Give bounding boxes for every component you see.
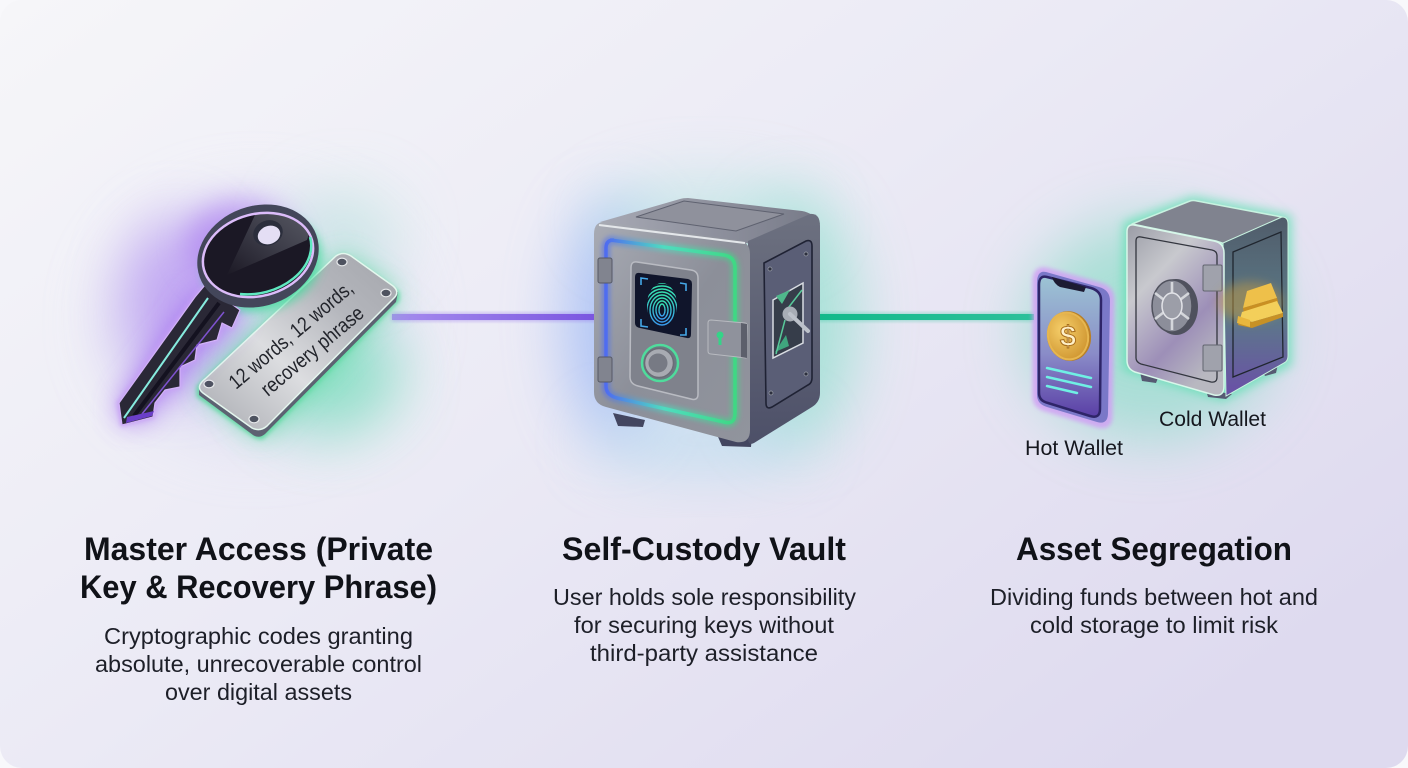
connector: key to vault bbox=[392, 313, 597, 321]
panel screws bbox=[768, 252, 808, 395]
icon: recovery phrase plate bbox=[198, 254, 398, 438]
safe neon outline bbox=[1127, 200, 1288, 397]
illustration: key and recovery plate bbox=[118, 188, 398, 438]
text block: asset segregation bbox=[990, 531, 1318, 638]
door neon bbox=[606, 240, 735, 423]
hinges bbox=[598, 258, 612, 382]
fingerprint screen bbox=[635, 273, 692, 338]
safe feet bbox=[1140, 364, 1278, 399]
description: master access: absolute, unrecoverable control bbox=[95, 651, 422, 677]
heading: master access: Master Access (Private bbox=[84, 531, 433, 567]
vault front bbox=[594, 222, 750, 442]
description: self-custody vault: User holds sole responsibility bbox=[553, 584, 857, 610]
screen lines bbox=[1047, 368, 1091, 393]
connector: vault to wallets bbox=[818, 313, 1034, 321]
description: self-custody vault: for securing keys without bbox=[574, 612, 835, 638]
lock plate bbox=[708, 320, 747, 358]
text block: master access bbox=[80, 531, 437, 705]
illustration: self-custody vault bbox=[594, 198, 820, 447]
label: cold wallet: Cold Wallet bbox=[1159, 407, 1266, 431]
vault top inset bbox=[636, 201, 784, 231]
label: hot wallet: Hot Wallet bbox=[1025, 436, 1123, 460]
description: self-custody vault: third-party assistance bbox=[590, 640, 818, 666]
key hole bbox=[250, 216, 286, 250]
side wheel window bbox=[773, 283, 808, 358]
plate text: recovery phrase bbox=[256, 302, 369, 401]
background glows bbox=[105, 180, 1275, 470]
description: master access: Cryptographic codes granting bbox=[104, 623, 413, 649]
heading: master access bbox=[80, 531, 437, 605]
icon: key bbox=[118, 188, 335, 425]
plate text: 12 words, 12 words, bbox=[224, 277, 358, 394]
coin: $ bbox=[1060, 321, 1076, 353]
description: master access bbox=[95, 623, 422, 705]
dial bbox=[642, 345, 678, 381]
safe front bbox=[1127, 225, 1224, 395]
description: master access: over digital assets bbox=[165, 679, 352, 705]
side panel bbox=[764, 241, 812, 408]
control panel bbox=[630, 262, 698, 399]
description: asset segregation: cold storage to limit risk bbox=[1030, 612, 1279, 638]
vault side bbox=[748, 214, 820, 444]
coin bbox=[1042, 307, 1096, 365]
safe wheel bbox=[1152, 279, 1198, 335]
phone neon outline bbox=[1035, 270, 1112, 426]
heading: master access: Key & Recovery Phrase) bbox=[80, 569, 437, 605]
description: asset segregation: Dividing funds between hot and bbox=[990, 584, 1318, 610]
description: self-custody vault bbox=[553, 584, 857, 666]
phone screen bbox=[1039, 277, 1101, 417]
plate rivets bbox=[204, 258, 391, 423]
safe door bbox=[1136, 237, 1217, 382]
vault top bbox=[600, 198, 820, 243]
gold bars bbox=[1218, 282, 1283, 328]
safe top bbox=[1132, 200, 1282, 244]
phone body bbox=[1037, 272, 1110, 423]
safe hinges bbox=[1203, 265, 1222, 371]
heading: self-custody vault: Self-Custody Vault bbox=[562, 531, 846, 567]
illustration: hot wallet phone bbox=[1035, 270, 1112, 426]
vault feet bbox=[613, 397, 806, 447]
safe side bbox=[1223, 217, 1288, 396]
heading: asset segregation: Asset Segregation bbox=[1016, 531, 1292, 567]
illustration: cold wallet safe bbox=[1127, 200, 1288, 399]
text block: self-custody vault bbox=[553, 531, 857, 666]
description: asset segregation bbox=[990, 584, 1318, 638]
